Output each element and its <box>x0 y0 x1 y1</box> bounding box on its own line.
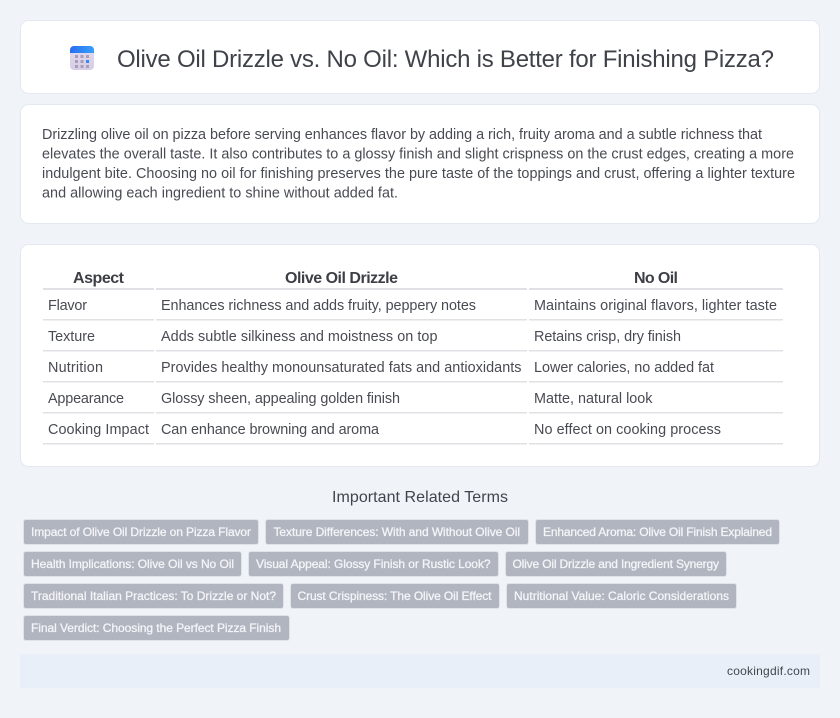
row: flavor: Flavor <box>48 298 87 314</box>
table header: Olive Oil Drizzle <box>285 270 398 287</box>
row: texture: Texture <box>48 329 95 345</box>
text block: description: indulgent bite. Choosing no oil for finishing preserves the pure taste of the toppings and crust, offering a lighter texture <box>42 166 795 182</box>
row: appearance: Glossy sheen, appealing golden finish <box>161 391 400 407</box>
tag: Visual Appeal: Glossy Finish or Rustic Look? <box>256 557 491 571</box>
text block: description: elevates the overall taste. It also contributes to a glossy finish and slight crispness on the crust edges, creating a more <box>42 146 794 162</box>
row: cooking impact: Cooking Impact <box>48 422 149 438</box>
tag: Final Verdict: Choosing the Perfect Pizza Finish <box>31 621 281 635</box>
tag: Traditional Italian Practices: To Drizzle or Not? <box>31 589 276 603</box>
heading: related terms: Important Related Terms <box>332 489 508 506</box>
tag <box>536 520 780 544</box>
title: Olive Oil Drizzle vs. No Oil: Which is Better for Finishing Pizza? <box>117 46 774 73</box>
row: nutrition: Nutrition <box>48 360 103 376</box>
tag: Health Implications: Olive Oil vs No Oil <box>31 557 234 571</box>
row: cooking impact: Can enhance browning and aroma <box>161 422 379 438</box>
panel: related term tags <box>24 520 780 640</box>
footer <box>20 654 820 688</box>
tag: Impact of Olive Oil Drizzle on Pizza Flavor <box>31 525 251 539</box>
row: texture <box>43 329 783 352</box>
row: texture: Adds subtle silkiness and moistness on top <box>161 329 438 345</box>
tag: Texture Differences: With and Without Olive Oil <box>274 525 520 539</box>
tag <box>266 520 528 544</box>
row: appearance <box>43 391 783 414</box>
table header: Aspect <box>73 270 125 287</box>
row: cooking impact <box>43 422 783 444</box>
panel: header <box>20 20 820 94</box>
tag: Olive Oil Drizzle and Ingredient Synergy <box>512 557 719 571</box>
row: texture: Retains crisp, dry finish <box>534 329 681 345</box>
tag: Enhanced Aroma: Olive Oil Finish Explained <box>543 525 772 539</box>
row: appearance: Matte, natural look <box>534 391 653 407</box>
row: flavor <box>43 298 783 320</box>
tag <box>290 584 500 608</box>
row: cooking impact: No effect on cooking process <box>534 422 721 438</box>
row: nutrition <box>43 360 783 382</box>
row: flavor: Enhances richness and adds fruity, peppery notes <box>161 298 476 314</box>
row: nutrition: Lower calories, no added fat <box>534 360 714 376</box>
tag <box>506 584 736 608</box>
tag <box>24 520 258 544</box>
table header: No Oil <box>634 270 678 287</box>
row: appearance: Appearance <box>48 391 124 407</box>
table header <box>43 270 783 290</box>
text block: description: and allowing each ingredient to shine without added fat. <box>42 186 398 202</box>
tag <box>506 552 726 576</box>
tag: Crust Crispiness: The Olive Oil Effect <box>298 589 492 603</box>
row: nutrition: Provides healthy monounsaturated fats and antioxidants <box>161 360 522 376</box>
text block: description: Drizzling olive oil on pizza before serving enhances flavor by adding a rich, fruity aroma and a subtle richness that <box>42 127 762 143</box>
tag <box>24 616 290 640</box>
tag <box>24 552 242 576</box>
row: flavor: Maintains original flavors, lighter taste <box>534 298 777 314</box>
tag: Nutritional Value: Caloric Considerations <box>514 589 729 603</box>
panel: description <box>20 104 820 224</box>
icon: calendar <box>70 46 94 70</box>
panel: comparison table <box>20 244 820 466</box>
tag <box>24 584 284 608</box>
tag <box>248 552 498 576</box>
footer source: cookingdif.com <box>727 664 810 678</box>
